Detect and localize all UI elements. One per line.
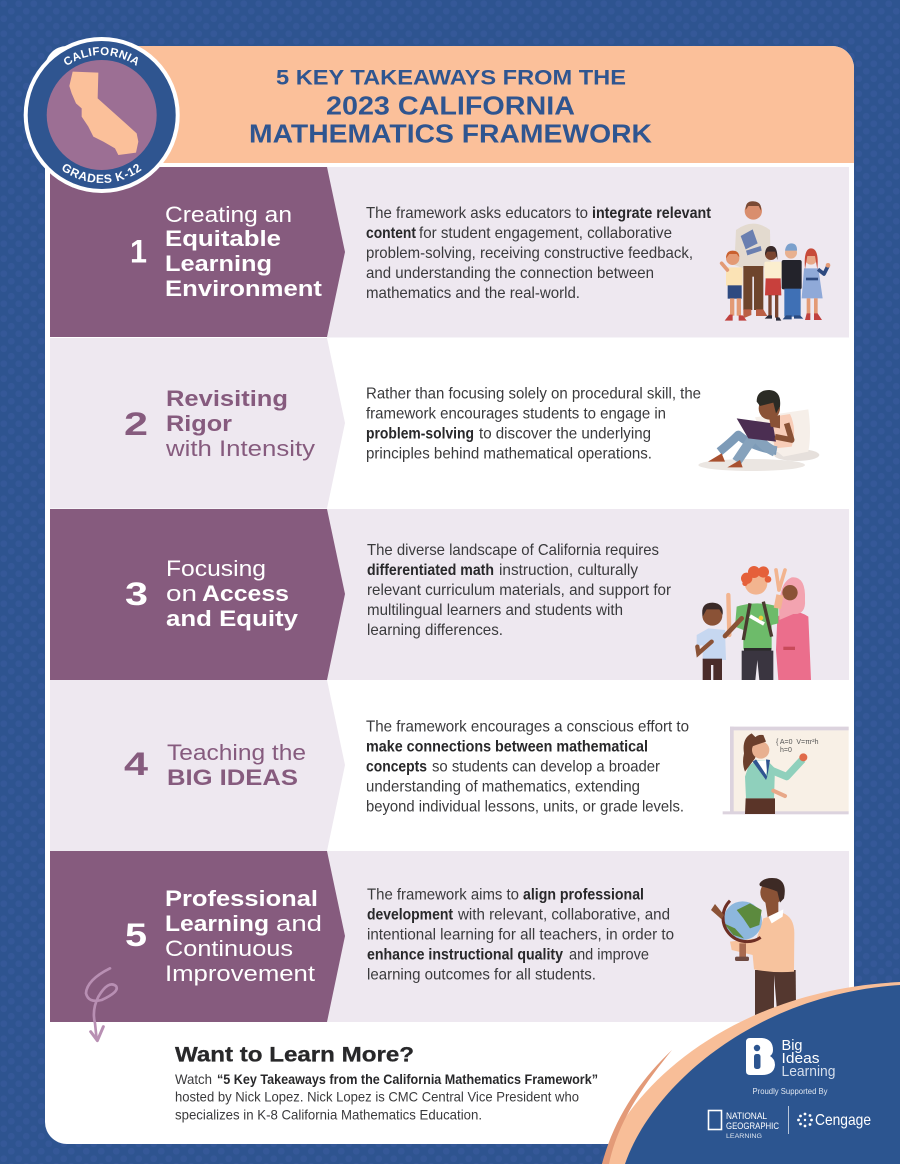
row 3 heading: on — [166, 581, 197, 606]
row 3 heading: and Equity — [166, 606, 299, 631]
call to action heading: Want to Learn More? — [175, 1044, 414, 1067]
california state shape — [69, 72, 138, 155]
row 1 heading: Equitable — [165, 226, 281, 251]
call to action text: specializes in K-8 California Mathematics Education. — [175, 1106, 482, 1122]
row 5 body text — [367, 886, 674, 984]
row 2 arrow — [50, 338, 345, 508]
icon: teacher at whiteboard: h=0 — [780, 747, 792, 754]
row 3 number: 3 — [125, 576, 148, 612]
row 3 arrow — [50, 509, 345, 680]
row 3 body text — [367, 542, 671, 639]
row 4 arrow — [50, 680, 345, 851]
header banner — [90, 46, 854, 163]
row 5 heading: and — [276, 911, 322, 936]
row 1 body text: integrate relevant — [592, 205, 712, 222]
row 5 body text: with relevant, collaborative, and — [457, 906, 670, 924]
row 2 heading — [165, 386, 315, 461]
footer corner with logos — [602, 982, 900, 1164]
row 2 body text: problem-solving — [366, 426, 474, 442]
logo: National Geographic Learning: GEOGRAPHIC — [726, 1121, 779, 1132]
title — [249, 66, 652, 149]
row 4 heading — [167, 740, 306, 790]
badge bottom label: GRADES K-12 — [62, 164, 142, 183]
row 5 body text: The framework aims to — [367, 886, 519, 904]
logo: Big Ideas Learning — [746, 1037, 836, 1080]
badge top label: CALIFORNIA — [64, 47, 138, 66]
arrow: squiggle pointing down — [86, 968, 117, 1041]
row 5 heading — [165, 886, 322, 986]
row 2 body text: Rather than focusing solely on procedural skill, the — [366, 386, 701, 402]
row 5 heading: Professional — [165, 886, 318, 911]
row 3 heading: Focusing — [166, 556, 266, 581]
logo: Cengage — [797, 1112, 871, 1129]
row 1 heading — [165, 202, 323, 301]
row 4 body text: concepts — [366, 759, 427, 776]
logo: Big Ideas Learning: Ideas — [782, 1050, 820, 1067]
row 4 body text — [366, 719, 689, 816]
row 2 body text: framework encourages students to engage in — [366, 406, 666, 422]
row 2 body text — [366, 386, 701, 462]
row 2 heading: with Intensity — [165, 436, 315, 461]
want to learn more block — [175, 1044, 598, 1122]
call to action text — [175, 1071, 598, 1122]
row 4 number: 4 — [124, 746, 148, 782]
row 5 heading: Improvement — [165, 961, 315, 986]
row 3 heading: Access — [202, 581, 289, 606]
row 4 heading: Teaching the — [167, 740, 306, 765]
badge: California grades K-12 — [24, 37, 180, 193]
row 5 heading: Continuous — [165, 936, 293, 961]
row 5 body text: align professional — [523, 886, 644, 904]
row 5 body text: and improve — [569, 946, 649, 964]
logo: National Geographic Learning — [708, 1110, 779, 1140]
row 1 heading: Creating an — [165, 202, 292, 227]
row 2 body text: to discover the underlying — [479, 426, 651, 442]
logo: National Geographic Learning: LEARNING — [726, 1134, 762, 1140]
icon: teacher at whiteboard: { A=0 V=πr²h — [776, 739, 819, 746]
row 1 body text: content — [366, 225, 417, 242]
row 1 body text: mathematics and the real-world. — [366, 285, 580, 302]
row 3 body text: instruction, culturally — [499, 562, 638, 579]
row 1 heading: Learning — [165, 251, 272, 276]
row 5 body text: intentional learning for all teachers, in order to — [367, 926, 674, 944]
row 1 panel — [50, 167, 849, 338]
call to action text: Watch — [175, 1071, 212, 1087]
icon: three diverse students — [697, 566, 811, 680]
icon: teacher with students — [722, 201, 830, 321]
row 1 heading: Environment — [165, 276, 323, 301]
row 5 body text: learning outcomes for all students. — [367, 966, 596, 984]
row 1 body text — [366, 205, 712, 302]
row 1 body text: and understanding the connection between — [366, 265, 654, 282]
call to action text: hosted by Nick Lopez. Nick Lopez is CMC Central Vice President who — [175, 1089, 579, 1105]
row 4 panel — [50, 680, 849, 851]
row 5 number: 5 — [125, 917, 147, 953]
row 3 panel — [50, 509, 849, 680]
icon: teacher at whiteboard — [723, 727, 849, 814]
row 2 heading: Revisiting — [166, 386, 288, 411]
row 4 body text: so students can develop a broader — [432, 759, 660, 776]
row 2 number: 2 — [124, 406, 148, 442]
row 2 panel — [50, 338, 819, 508]
logo: National Geographic Learning: NATIONAL — [726, 1111, 767, 1122]
row 4 body text: The framework encourages a conscious effort to — [366, 719, 689, 736]
row 4 body text: understanding of mathematics, extending — [366, 779, 640, 796]
row 3 heading — [166, 556, 299, 631]
row 2 body text: principles behind mathematical operations. — [366, 446, 652, 462]
logo: Big Ideas Learning: Big — [782, 1037, 802, 1054]
row 1 number: 1 — [130, 234, 147, 270]
icon: student reading — [698, 390, 819, 471]
logo: Cengage: Cengage — [815, 1112, 871, 1129]
row 1 arrow — [50, 167, 345, 337]
row 5 body text: development — [367, 906, 454, 924]
row 3 body text: relevant curriculum materials, and support for — [367, 582, 671, 599]
row 4 body text: make connections between mathematical — [366, 739, 648, 756]
row 5 body text: enhance instructional quality — [367, 946, 563, 964]
title: 5 KEY TAKEAWAYS FROM THE — [276, 66, 626, 89]
row 2 heading: Rigor — [166, 411, 232, 436]
title: MATHEMATICS FRAMEWORK — [249, 119, 652, 149]
icon: teacher holding globe — [711, 878, 796, 1020]
row 3 body text: learning differences. — [367, 622, 503, 639]
row 4 body text: beyond individual lessons, units, or grade levels. — [366, 799, 684, 816]
logo: Big Ideas Learning: Learning — [782, 1063, 836, 1080]
row 1 body text: problem-solving, receiving constructive feedback, — [366, 245, 693, 262]
row 3 body text: The diverse landscape of California requires — [367, 542, 659, 559]
supported by label: Proudly Supported By — [752, 1087, 828, 1096]
row 1 body text: The framework asks educators to — [366, 205, 588, 222]
row 5 heading: Learning — [165, 911, 269, 936]
row 5 panel — [50, 851, 849, 1022]
title: 2023 CALIFORNIA — [326, 90, 575, 120]
row 3 body text: multilingual learners and students with — [367, 602, 623, 619]
row 4 heading: BIG IDEAS — [167, 765, 298, 790]
row 1 body text: for student engagement, collaborative — [419, 225, 672, 242]
row 3 body text: differentiated math — [367, 562, 494, 579]
call to action text: “5 Key Takeaways from the California Mathematics Framework” — [217, 1071, 598, 1087]
row 5 arrow — [50, 851, 345, 1022]
